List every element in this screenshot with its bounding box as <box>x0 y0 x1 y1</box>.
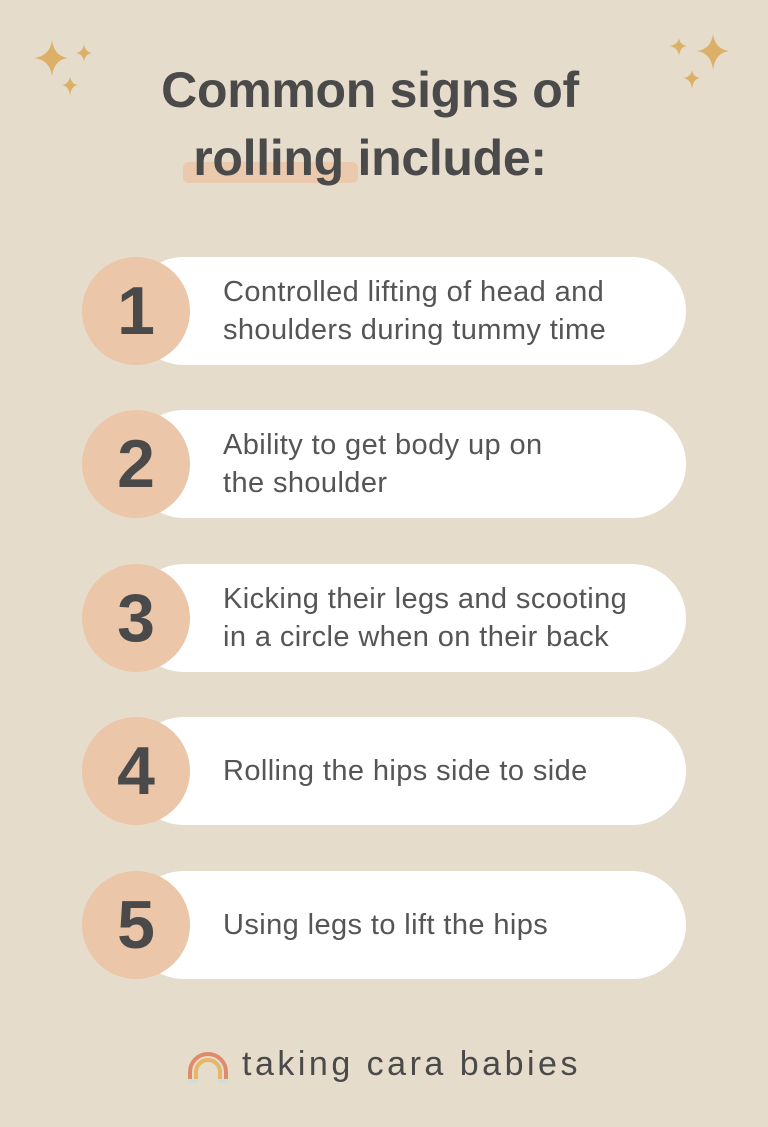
item 4: 4 <box>117 733 155 809</box>
title <box>161 62 580 186</box>
sparkles right <box>669 34 729 89</box>
item 2 <box>82 410 686 518</box>
title underline brush <box>183 162 358 183</box>
item 2: 2 <box>117 426 155 502</box>
item 4: Rolling the hips side to side <box>223 755 588 787</box>
item 5 <box>82 871 686 979</box>
item 3: 3 <box>117 580 155 656</box>
sparkles left <box>34 40 92 96</box>
item 3 <box>82 564 686 672</box>
item 5: 5 <box>117 887 155 963</box>
item 5: Using legs to lift the hips <box>223 909 548 941</box>
item 1 <box>82 257 686 365</box>
item 1: Controlled lifting of head and shoulders during tummy time <box>223 276 606 346</box>
logo: taking cara babies <box>242 1045 581 1083</box>
item 3: in a circle when on their back <box>223 621 609 653</box>
icon: rainbow <box>188 1052 228 1083</box>
item 4 <box>82 717 686 825</box>
item 3: Kicking their legs and scooting <box>223 583 627 615</box>
title: Common signs of <box>161 62 579 118</box>
title: rolling include: <box>193 130 547 186</box>
item 1: 1 <box>117 273 155 349</box>
item 2: the shoulder <box>223 467 387 499</box>
item 2: Ability to get body up on <box>223 429 543 461</box>
